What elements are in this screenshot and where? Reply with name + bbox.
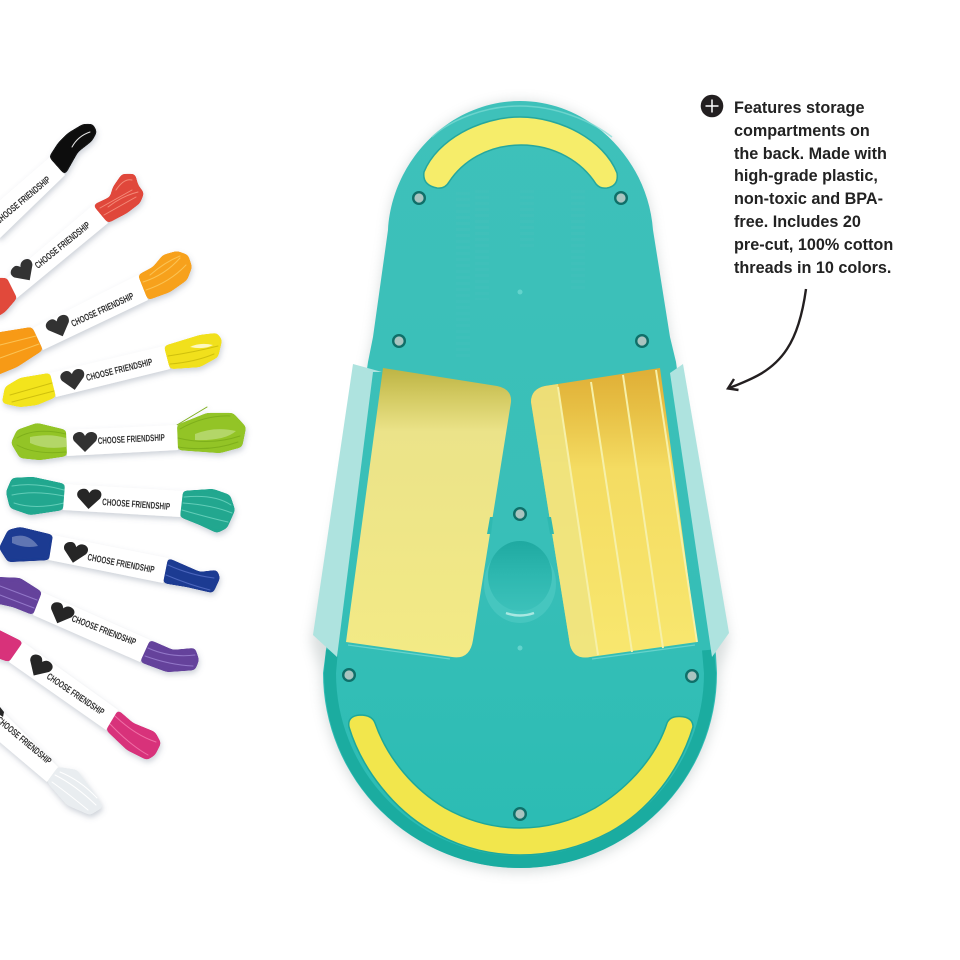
- right storage compartment with dividers: [531, 368, 697, 658]
- callout: features: [701, 95, 898, 390]
- skein: white: [0, 704, 103, 815]
- screws: [343, 192, 698, 820]
- skein: red: [0, 174, 144, 318]
- loom body: [323, 101, 717, 868]
- top rim highlight: [432, 106, 612, 137]
- skein: black: [0, 124, 97, 238]
- skein: navy: [0, 527, 220, 593]
- centre tabs: [487, 517, 554, 534]
- top yellow grip: [424, 117, 617, 188]
- skein: orange: CHOOSE FRIENDSHIP: [70, 291, 136, 330]
- engraved moulding text: [463, 190, 578, 360]
- skein: navy: CHOOSE FRIENDSHIP: [86, 552, 156, 576]
- left hinged lid: [313, 364, 382, 657]
- skein: yellow: [2, 333, 222, 407]
- left storage compartment: [346, 368, 511, 657]
- feature text: compartments on: [734, 122, 870, 140]
- skein: green: [11, 407, 246, 460]
- skein: purple: CHOOSE FRIENDSHIP: [70, 614, 138, 648]
- right hinged lid: [670, 364, 729, 657]
- skein: yellow: CHOOSE FRIENDSHIP: [85, 357, 154, 384]
- small moulded dots: [518, 290, 522, 650]
- skein: teal: CHOOSE FRIENDSHIP: [102, 497, 171, 513]
- skein: pink: [0, 628, 161, 760]
- feature text: free. Includes 20: [734, 213, 861, 231]
- feature text: high-grade plastic,: [734, 167, 878, 185]
- bottom yellow grip: [349, 715, 693, 855]
- compartment edge highlights: [348, 645, 695, 659]
- skein: green: CHOOSE FRIENDSHIP: [98, 432, 165, 447]
- feature text: Features storage: [734, 99, 864, 117]
- feature text: non-toxic and BPA-: [734, 190, 883, 208]
- arrow: [728, 289, 806, 390]
- panel: embroidery thread skeins: [0, 124, 246, 815]
- skein: red: CHOOSE FRIENDSHIP: [33, 220, 93, 271]
- skein: purple: [0, 577, 199, 672]
- panel: loom back: [311, 101, 729, 872]
- skein: pink: CHOOSE FRIENDSHIP: [44, 671, 106, 718]
- thumb recess: [484, 541, 556, 623]
- loom shadow: [311, 101, 729, 872]
- skein: orange: [0, 251, 192, 376]
- lower rim shading: [330, 650, 710, 862]
- feature text: pre-cut, 100% cotton: [734, 236, 893, 254]
- feature text: threads in 10 colors.: [734, 259, 891, 277]
- icon: plus: [701, 95, 723, 117]
- skein: teal: [6, 477, 235, 533]
- feature text: the back. Made with: [734, 145, 887, 163]
